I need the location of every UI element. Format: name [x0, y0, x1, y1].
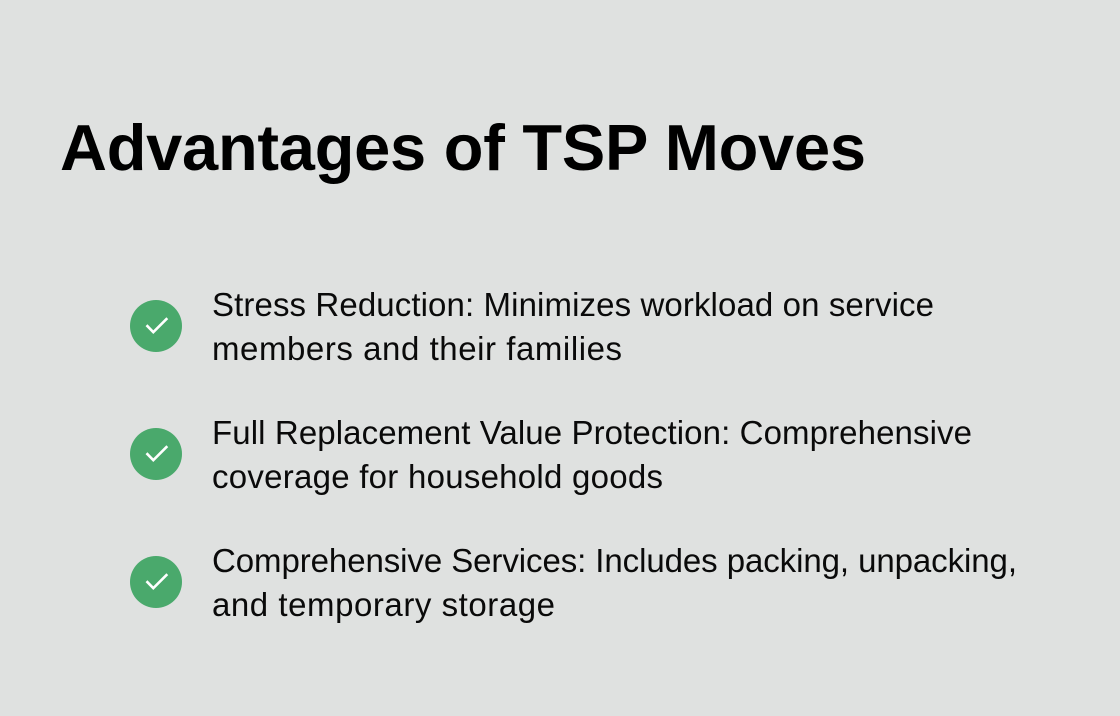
- text: stress reduction: [212, 286, 934, 367]
- text: stress reduction: members and their families: [212, 330, 622, 367]
- title: Advantages of TSP Moves: [60, 111, 866, 184]
- list item: comprehensive services: [130, 542, 1017, 623]
- list item: stress reduction: [130, 286, 934, 367]
- icon: green check circle: [130, 300, 182, 352]
- text: full replacement value protection: [212, 414, 972, 495]
- text: comprehensive services: Comprehensive Services: Includes packing, unpacking,: [212, 542, 1017, 579]
- text: full replacement value protection: coverage for household goods: [212, 458, 663, 495]
- icon: green check circle: [130, 556, 182, 608]
- text: comprehensive services: and temporary storage: [212, 586, 555, 623]
- text: comprehensive services: [212, 542, 1017, 623]
- list item: full replacement value protection: [130, 414, 972, 495]
- text: stress reduction: Stress Reduction: Minimizes workload on service: [212, 286, 934, 323]
- text: full replacement value protection: Full Replacement Value Protection: Comprehensive: [212, 414, 972, 451]
- icon: green check circle: [130, 428, 182, 480]
